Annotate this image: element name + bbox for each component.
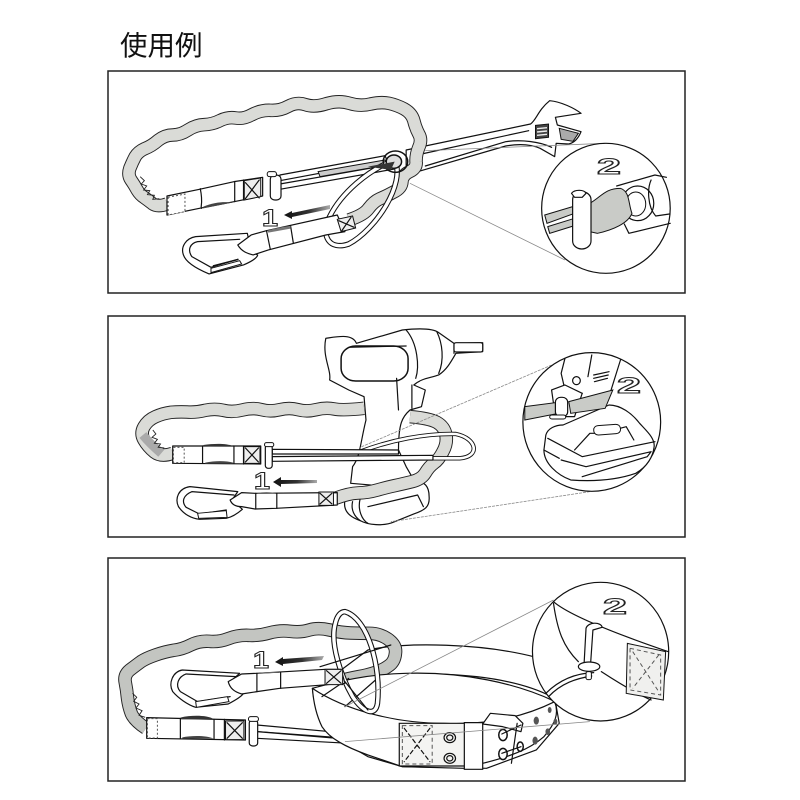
stretch cord band <box>125 629 396 728</box>
arrow <box>284 205 330 219</box>
cables <box>280 156 387 181</box>
carabiner and hook webbing <box>177 487 337 519</box>
belt front <box>312 673 559 768</box>
magnifier detail circle <box>523 353 661 491</box>
label 2: 2 <box>603 594 627 619</box>
stopper <box>248 717 258 746</box>
wrench and lanyard illustration <box>129 101 670 274</box>
belt and lanyard illustration <box>125 582 669 769</box>
zoom guide lines <box>410 143 605 260</box>
label 1: 1 <box>254 468 270 495</box>
band over battery <box>335 417 446 498</box>
cables <box>272 449 399 454</box>
stopper <box>265 443 274 468</box>
arrow <box>275 656 324 666</box>
icon: wrench <box>406 101 581 173</box>
driver and lanyard illustration <box>142 329 661 525</box>
title: 使用例 <box>120 30 202 61</box>
zoom guide lines <box>345 600 590 742</box>
panel: adjustable wrench <box>108 71 685 293</box>
stopper <box>267 172 281 200</box>
label 2: 2 <box>597 154 621 179</box>
magnifier detail circle <box>532 582 669 721</box>
sleeve and stitched webbing <box>147 716 245 740</box>
label 1: 1 <box>253 647 269 674</box>
carabiner and hook webbing <box>183 215 356 274</box>
zoom guide lines <box>360 365 590 522</box>
magnifier detail circle <box>542 143 670 273</box>
panel: impact driver <box>108 316 685 537</box>
sleeve and stitched webbing <box>167 177 263 215</box>
panel: tool belt <box>108 558 685 781</box>
battery <box>345 480 429 525</box>
big loop <box>334 612 378 712</box>
belt buckle and patch <box>399 707 557 769</box>
carabiner and hook webbing <box>171 669 345 707</box>
big loop <box>360 434 474 458</box>
label 1: 1 <box>262 205 278 232</box>
icon: belt back strap <box>314 645 552 697</box>
sleeve and stitched webbing <box>173 444 261 464</box>
icon: impact driver body <box>325 329 483 487</box>
label 2: 2 <box>617 373 641 398</box>
stretch cord band <box>129 102 421 220</box>
big loop <box>326 160 397 246</box>
stretch cord band <box>142 408 364 455</box>
cables <box>257 725 349 738</box>
arrow <box>273 477 317 487</box>
